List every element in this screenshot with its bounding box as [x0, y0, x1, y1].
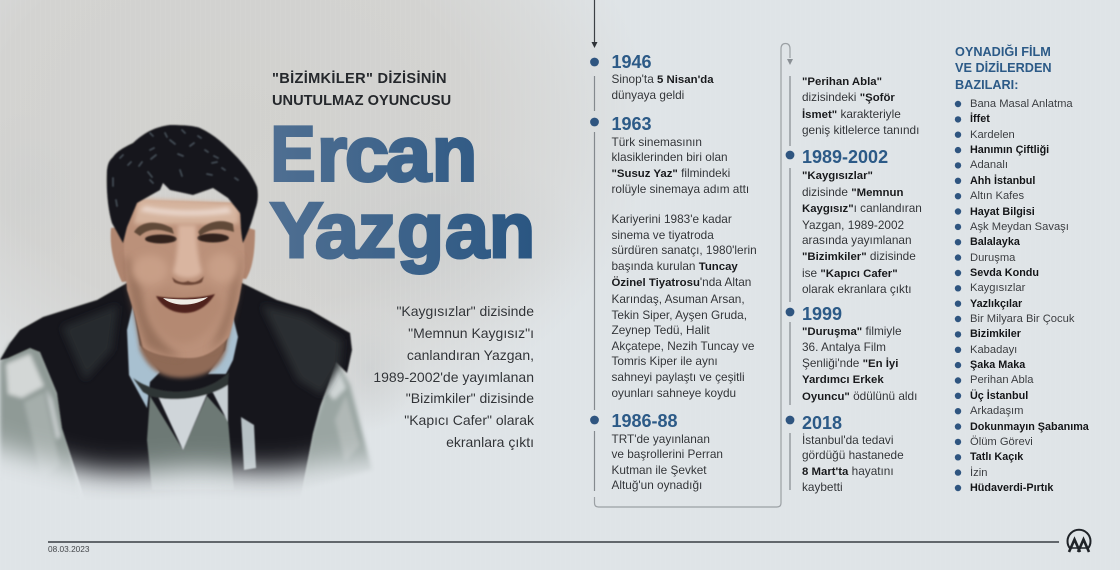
timeline 1989-2002: ise "Kapıcı Cafer"	[802, 266, 898, 280]
left sweater sleeve	[0, 341, 76, 482]
filmography list: Balalayka	[970, 236, 1020, 248]
timeline 1963: Türk sinemasının	[612, 134, 702, 148]
timeline 1946: Sinop'ta 5 Nisan'da	[612, 72, 714, 86]
name heading: g	[397, 186, 444, 274]
timeline 1986-88: TRT'de yayınlanan	[612, 432, 710, 446]
sweater front	[133, 372, 256, 490]
timeline 1989-2002: 1989-2002	[802, 147, 888, 167]
filmography list: Şaka Maka	[970, 359, 1025, 371]
filmography list: Arkadaşım	[970, 405, 1023, 417]
filmography list	[970, 98, 1089, 494]
face	[124, 200, 245, 358]
filmography list: Ölüm Görevi	[970, 436, 1033, 448]
filmography list: İzin	[970, 467, 987, 479]
footer rule	[48, 541, 1059, 542]
filmography list: Üç İstanbul	[970, 390, 1028, 402]
timeline 1986-88: 1986-88	[612, 410, 678, 430]
filmography list: Hüdaverdi-Pırtık	[970, 482, 1053, 494]
name heading: a	[315, 186, 360, 274]
mouth	[156, 294, 215, 313]
timeline 1989-2002	[802, 147, 922, 296]
intro paragraph: "Kaygısızlar" dizisinde	[396, 303, 534, 319]
filmography list: Ahh İstanbul	[970, 175, 1035, 187]
nose	[173, 225, 202, 278]
filmography list: Kardelen	[970, 129, 1015, 141]
timeline 1963: rolüyle sinemaya adım attı	[612, 182, 749, 196]
name heading: n	[489, 186, 535, 274]
filmography list: Dokunmayın Şabanıma	[970, 421, 1089, 433]
timeline 1999: "Duruşma" filmiyle	[802, 324, 902, 338]
timeline 1999: Şenliği'nde "En İyi	[802, 356, 898, 370]
filmography heading: VE DİZİLERDEN	[955, 61, 1052, 75]
filmography list: Perihan Abla	[970, 374, 1033, 386]
filmography list: Aşk Meydan Savaşı	[970, 221, 1069, 233]
filmography list: Tatlı Kaçık	[970, 451, 1023, 463]
filmography list: Duruşma	[970, 252, 1015, 264]
filmography heading: BAZILARI:	[955, 78, 1018, 92]
timeline 1989-2002: Kaygısız"ı canlandıran	[802, 201, 922, 215]
career paragraph: Tekin Siper, Ayşen Gruda,	[612, 308, 747, 322]
intro paragraph: "Kapıcı Cafer" olarak	[404, 412, 534, 428]
timeline 1963: klasiklerinden biri olan	[612, 150, 728, 164]
timeline 2018: 8 Mart'ta hayatını	[802, 464, 894, 478]
career paragraph: Kariyerini 1983'e kadar	[612, 212, 732, 226]
timeline 2018: kaybetti	[802, 480, 843, 494]
timeline 1999: 36. Antalya Film	[802, 340, 886, 354]
eyebrows and eyes	[134, 221, 234, 244]
timeline 1999	[802, 304, 917, 403]
intro paragraph: "Memnun Kaygısız"ı	[408, 325, 534, 341]
Perihan Abla text: "Perihan Abla"	[802, 76, 882, 88]
timeline 1989-2002: arasında yayımlanan	[802, 233, 912, 247]
filmography list: Bizimkiler	[970, 328, 1021, 340]
neck	[132, 312, 233, 381]
timeline 1989-2002: "Kaygısızlar"	[802, 170, 873, 182]
subtitle: UNUTULMAZ OYUNCUSU	[272, 93, 451, 109]
career paragraph: sahneyi paylaştı ve çeşitli	[612, 370, 745, 384]
filmography list: Kaygısızlar	[970, 282, 1025, 294]
career paragraph	[612, 212, 757, 400]
timeline 1999: Oyuncu" ödülünü aldı	[802, 389, 917, 403]
name heading: Y	[270, 186, 323, 274]
Perihan Abla text: İsmet" karakteriyle	[802, 107, 901, 121]
timeline 1989-2002: "Bizimkiler" dizisinde	[802, 249, 916, 263]
filmography list: Sevda Kondu	[970, 267, 1039, 279]
timeline 1963	[612, 114, 749, 196]
timeline 1963: "Susuz Yaz" filmindeki	[612, 166, 730, 180]
career paragraph: Tomris Kiper ile aynı	[612, 354, 718, 368]
hair	[107, 125, 258, 243]
date: 08.03.2023	[48, 544, 90, 554]
filmography list: Bir Milyara Bir Çocuk	[970, 313, 1074, 325]
vest	[0, 282, 352, 500]
timeline 2018: İstanbul'da tedavi	[802, 432, 893, 446]
right sweater sleeve	[304, 364, 372, 482]
filmography list: Adanalı	[970, 159, 1008, 171]
Perihan Abla text: geniş kitlelerce tanındı	[802, 123, 919, 137]
career paragraph: oyunları sahneye koydu	[612, 386, 736, 400]
name heading: a	[386, 110, 432, 198]
intro paragraph: 1989-2002'de yayımlanan	[373, 369, 534, 385]
subtitle: "BİZİMKİLER" DİZİSİNİN	[272, 71, 447, 87]
portrait photo	[0, 124, 372, 494]
career paragraph: başında kurulan Tuncay	[612, 259, 738, 273]
shirt collar	[127, 305, 238, 408]
name heading: a	[445, 186, 490, 274]
intro paragraph: "Bizimkiler" dizisinde	[406, 390, 534, 406]
timeline 1946	[612, 52, 714, 102]
timeline 1986-88	[612, 410, 723, 492]
filmography heading	[955, 44, 1052, 92]
career paragraph: sürdüren sanatçı, 1980'lerin	[612, 243, 757, 257]
timeline 1999: 1999	[802, 304, 842, 324]
intro paragraph	[373, 303, 534, 450]
intro paragraph: canlandıran Yazgan,	[407, 347, 534, 363]
filmography list: Yazlıkçılar	[970, 298, 1022, 310]
timeline 2018: gördüğü hastanede	[802, 448, 904, 462]
career paragraph: Özinel Tiyatrosu'nda Altan	[612, 275, 751, 289]
filmography list: Kabadayı	[970, 344, 1017, 356]
timeline 1986-88: Kutman ile Şevket	[612, 463, 707, 477]
filmography list: Hayat Bilgisi	[970, 206, 1035, 218]
name heading: z	[358, 186, 396, 274]
timeline 1989-2002: olarak ekranlara çıktı	[802, 282, 912, 296]
name heading: E	[270, 110, 316, 198]
subtitle	[272, 70, 451, 109]
hair highlights	[113, 130, 238, 206]
Perihan Abla text: dizisindeki "Şoför	[802, 90, 895, 104]
timeline 2018	[802, 412, 904, 494]
timeline 1989-2002: dizisinde "Memnun	[802, 185, 903, 199]
Perihan Abla text	[802, 76, 919, 137]
career paragraph: Akçatepe, Nezih Tuncay ve	[612, 339, 754, 353]
timeline 1946: dünyaya geldi	[612, 88, 684, 102]
filmography list: Bana Masal Anlatma	[970, 98, 1073, 110]
timeline 1986-88: ve başrollerini Perran	[612, 447, 723, 461]
intro paragraph: ekranlara çıktı	[446, 434, 534, 450]
career paragraph: Karındaş, Asuman Arsan,	[612, 292, 745, 306]
timeline 1963: 1963	[612, 114, 652, 134]
filmography list: İffet	[970, 113, 990, 125]
name heading: n	[432, 110, 477, 198]
timeline 1989-2002: Yazgan, 1989-2002	[802, 218, 904, 232]
filmography list: Hanımın Çiftliği	[970, 144, 1049, 156]
name heading: c	[345, 110, 389, 198]
name heading: r	[317, 110, 347, 198]
ears	[111, 226, 130, 282]
timeline 1946: 1946	[612, 52, 652, 72]
career paragraph: sinema ve tiyatroda	[612, 228, 714, 242]
filmography list: Altın Kafes	[970, 190, 1024, 202]
filmography heading: OYNADIĞI FİLM	[955, 45, 1051, 59]
career paragraph: Zeynep Tedü, Halit	[612, 323, 710, 337]
face shading	[125, 198, 241, 357]
timeline 1999: Yardımcı Erkek	[802, 374, 884, 386]
timeline 2018: 2018	[802, 412, 842, 432]
timeline 1986-88: Altuğ'un oynadığı	[612, 478, 702, 492]
